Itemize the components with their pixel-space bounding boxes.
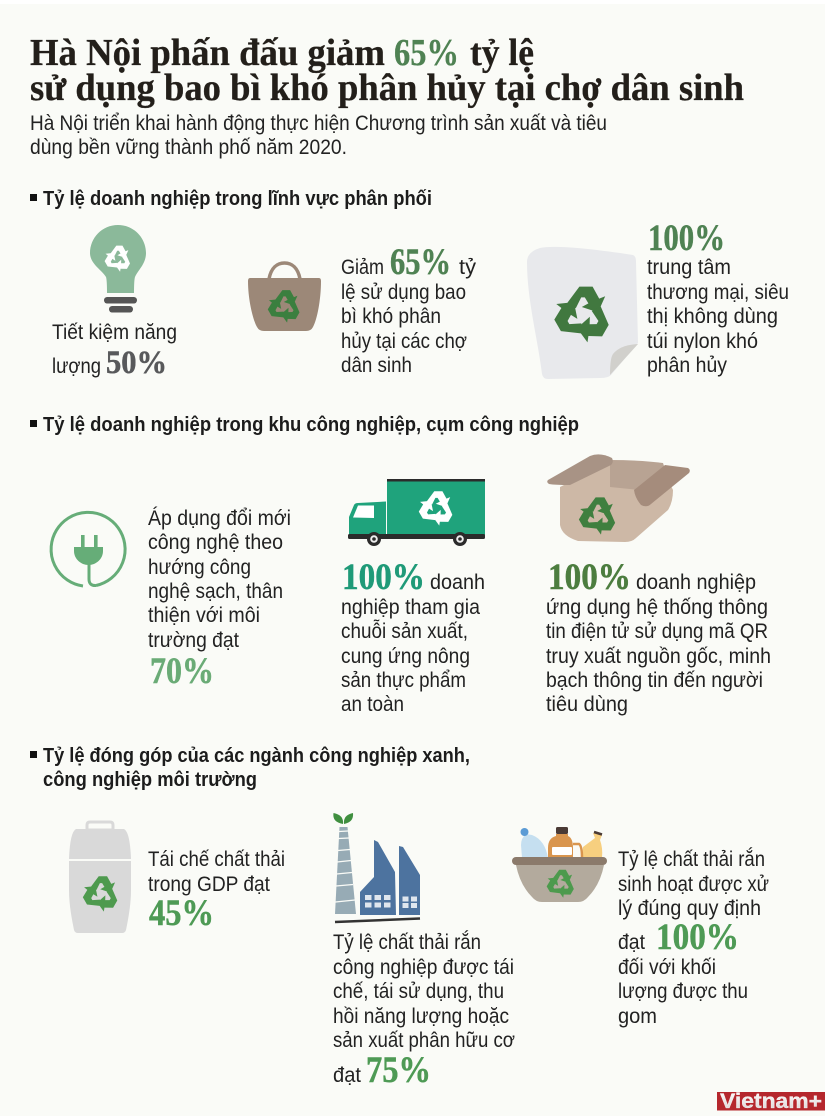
text: food supply chain: cung ứng nông: [341, 645, 470, 668]
text: industrial solid waste: đạt: [333, 1064, 361, 1087]
text: QR traceability: doanh nghiệp: [636, 571, 756, 594]
subtitle: dùng bền vững thành phố năm 2020.: [30, 136, 347, 159]
text: food supply chain: an toàn: [341, 693, 404, 716]
text: QR traceability: bạch thông tin đến người: [546, 669, 763, 692]
text: industrial solid waste: chế, tái sử dụng, thu: [333, 980, 504, 1003]
text: household solid waste: sinh hoạt được xử: [618, 873, 769, 896]
text: QR traceability: 100%: [548, 557, 631, 598]
text: QR traceability: tiêu dùng: [546, 693, 628, 716]
text: waste recycling in GDP: trong GDP đạt: [148, 873, 270, 896]
text: supermarkets: phân hủy: [647, 354, 727, 377]
text: food supply chain: sản thực phẩm: [341, 669, 466, 692]
icon: light bulb: [90, 225, 146, 312]
text: industrial solid waste: công nghiệp được tái: [333, 956, 514, 979]
heading: section 1: Tỷ lệ doanh nghiệp trong lĩnh vực phân phối: [43, 188, 432, 210]
text: industrial solid waste: sản xuất phân hữu cơ: [333, 1029, 515, 1052]
text: household solid waste: lý đúng quy định: [618, 897, 761, 920]
text: reduce packaging: lệ sử dụng bao: [341, 281, 466, 304]
text: supermarkets: trung tâm: [647, 256, 731, 279]
text: clean technology: hướng công: [148, 556, 251, 579]
text: supermarkets: túi nylon khó: [647, 330, 758, 353]
text: industrial solid waste: [333, 931, 515, 1091]
text: household solid waste: [618, 848, 769, 1028]
text: QR traceability: [546, 557, 771, 716]
text: supermarkets: 100%: [648, 218, 725, 259]
title: [30, 32, 744, 109]
text: reduce packaging: tỷ: [459, 256, 477, 279]
icon: factory with leaves: [333, 813, 420, 922]
text: reduce packaging: 65%: [390, 242, 451, 283]
text: clean technology: công nghệ theo: [148, 531, 283, 554]
text: energy saving: lượng: [52, 355, 101, 378]
text: household solid waste: đối với khối: [618, 956, 716, 979]
text: clean technology: [148, 507, 291, 692]
heading: section 2: Tỷ lệ doanh nghiệp trong khu công nghiệp, cụm công nghiệp: [43, 414, 579, 436]
text: household solid waste: đạt: [618, 931, 645, 954]
text: household solid waste: lượng được thu: [618, 980, 748, 1003]
panel: reduce packaging: [248, 242, 477, 377]
icon: truck: [348, 479, 485, 546]
text: household solid waste: Tỷ lệ chất thải rắn: [618, 848, 765, 871]
text: reduce packaging: hủy tại các chợ: [341, 330, 467, 353]
text: supermarkets: thị không dùng: [647, 305, 778, 328]
text: household solid waste: gom: [618, 1005, 657, 1028]
text: energy saving: 50%: [106, 345, 167, 381]
subtitle: [30, 112, 607, 159]
text: energy saving: [52, 321, 177, 381]
icon: cardboard box: [547, 454, 690, 542]
heading: section 3: Tỷ lệ đóng góp của các ngành công nghiệp xanh,: [43, 745, 470, 767]
panel: household solid waste: [512, 827, 769, 1028]
text: industrial solid waste: 75%: [366, 1050, 431, 1091]
text: industrial solid waste: hồi năng lượng hoặc: [333, 1005, 509, 1028]
text: clean technology: 70%: [150, 651, 214, 692]
text: waste recycling in GDP: 45%: [149, 893, 214, 934]
text: waste recycling in GDP: Tái chế chất thải: [148, 848, 285, 871]
text: food supply chain: nghiệp tham gia: [341, 596, 480, 619]
text: waste recycling in GDP: [148, 848, 285, 934]
panel: waste recycling in GDP: [69, 822, 285, 934]
title: sử dụng bao bì khó phân hủy tại chợ dân sinh: [30, 67, 744, 109]
text: food supply chain: doanh: [430, 571, 485, 594]
text: food supply chain: chuỗi sản xuất,: [341, 620, 468, 643]
title: 65%: [394, 32, 459, 74]
text: energy saving: Tiết kiệm năng: [52, 321, 177, 344]
panel: clean technology: [51, 507, 291, 692]
heading: section 3: công nghiệp môi trường: [43, 769, 257, 791]
icon: basket with bottles: [512, 827, 607, 902]
icon: nylon sheet: [527, 247, 638, 379]
icon: shopping bag: [248, 263, 321, 331]
text: supermarkets: [647, 218, 789, 377]
text: reduce packaging: Giảm: [341, 256, 384, 279]
text: clean technology: Áp dụng đổi mới: [148, 507, 291, 530]
icon: trash bin: [69, 822, 131, 933]
panel: food supply chain: [341, 479, 485, 716]
title: Hà Nội phấn đấu giảm: [30, 32, 385, 74]
subtitle: Hà Nội triển khai hành động thực hiện Chương trình sản xuất và tiêu: [30, 112, 607, 135]
panel: energy saving: [52, 225, 177, 381]
heading: section 3: [30, 745, 470, 791]
icon: plug in circle: [51, 512, 125, 586]
panel: QR traceability: [546, 454, 771, 716]
text: QR traceability: tin điện tử sử dụng mã QR: [546, 620, 768, 643]
title: tỷ lệ: [470, 32, 534, 74]
panel: industrial solid waste: [333, 813, 515, 1091]
text: food supply chain: [341, 557, 485, 716]
text: household solid waste: 100%: [656, 917, 739, 958]
text: supermarkets: thương mại, siêu: [647, 281, 789, 304]
text: QR traceability: truy xuất nguồn gốc, minh: [546, 645, 771, 668]
text: reduce packaging: [341, 242, 477, 377]
text: QR traceability: ứng dụng hệ thống thông: [546, 596, 768, 619]
logo: Vietnam+: Vietnam+: [720, 1090, 822, 1113]
text: clean technology: thiện với môi: [148, 604, 260, 627]
text: food supply chain: 100%: [342, 557, 425, 598]
text: reduce packaging: bì khó phân: [341, 305, 441, 328]
text: reduce packaging: dân sinh: [341, 354, 412, 377]
panel: supermarkets: [527, 218, 789, 379]
text: industrial solid waste: Tỷ lệ chất thải rắn: [333, 931, 481, 954]
text: clean technology: nghệ sạch, thân: [148, 580, 283, 603]
text: clean technology: trường đạt: [148, 629, 239, 652]
